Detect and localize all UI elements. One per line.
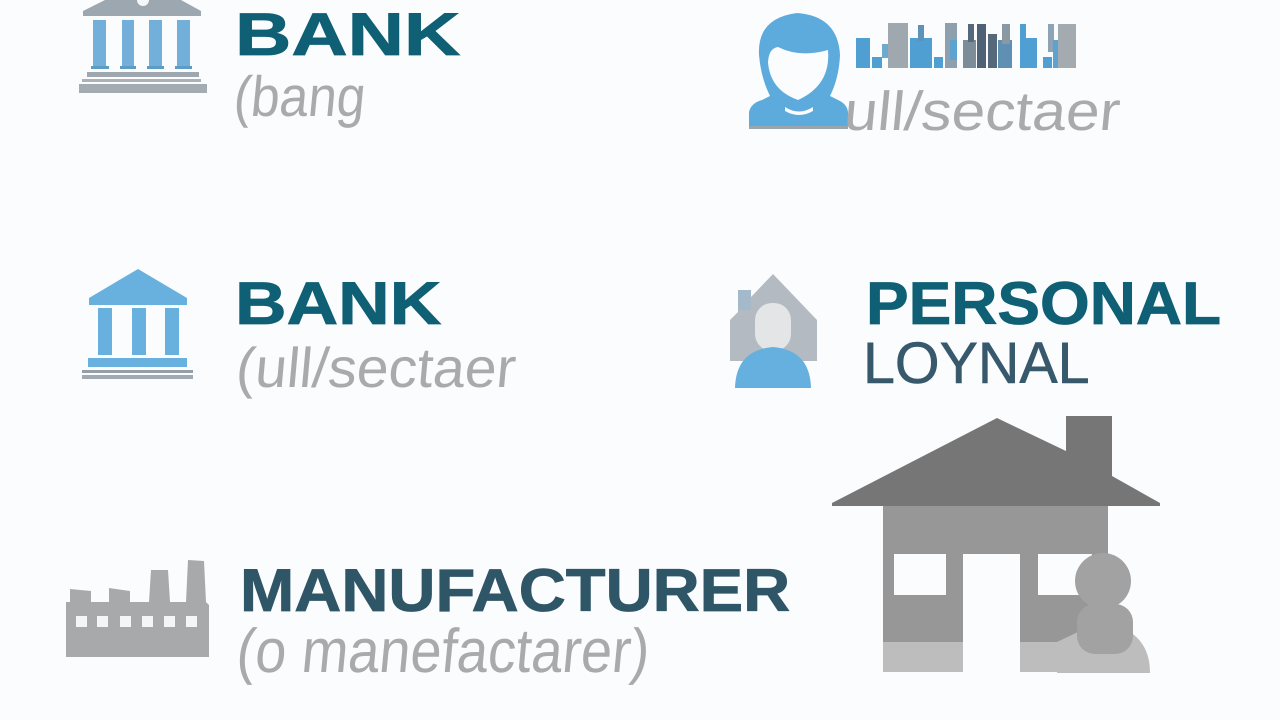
heading: loynal: LOYNAL bbox=[863, 331, 1090, 396]
text: manufacturer label top right: ull/sectaer bbox=[841, 80, 1123, 142]
heading: bank middle: BANK bbox=[235, 270, 441, 337]
heading: bank top: BANK bbox=[235, 1, 460, 68]
heading: personal: PERSONAL bbox=[866, 270, 1221, 337]
garbled heading bars bbox=[856, 23, 1076, 68]
icon: bank middle bbox=[82, 269, 193, 379]
icon: factory bbox=[66, 560, 209, 657]
text: sector label middle: (ull/sectaer bbox=[234, 336, 519, 399]
icon: bank top left bbox=[79, 0, 207, 93]
icon: house with person bbox=[730, 274, 817, 388]
text: loans label top: (bang bbox=[231, 65, 369, 129]
heading: manufacturer: MANUFACTURER bbox=[240, 557, 790, 624]
text: manufacturer label: (o manefactarer) bbox=[234, 617, 653, 686]
icon: woman portrait bbox=[749, 13, 848, 129]
icon: large house with person bbox=[832, 416, 1160, 673]
